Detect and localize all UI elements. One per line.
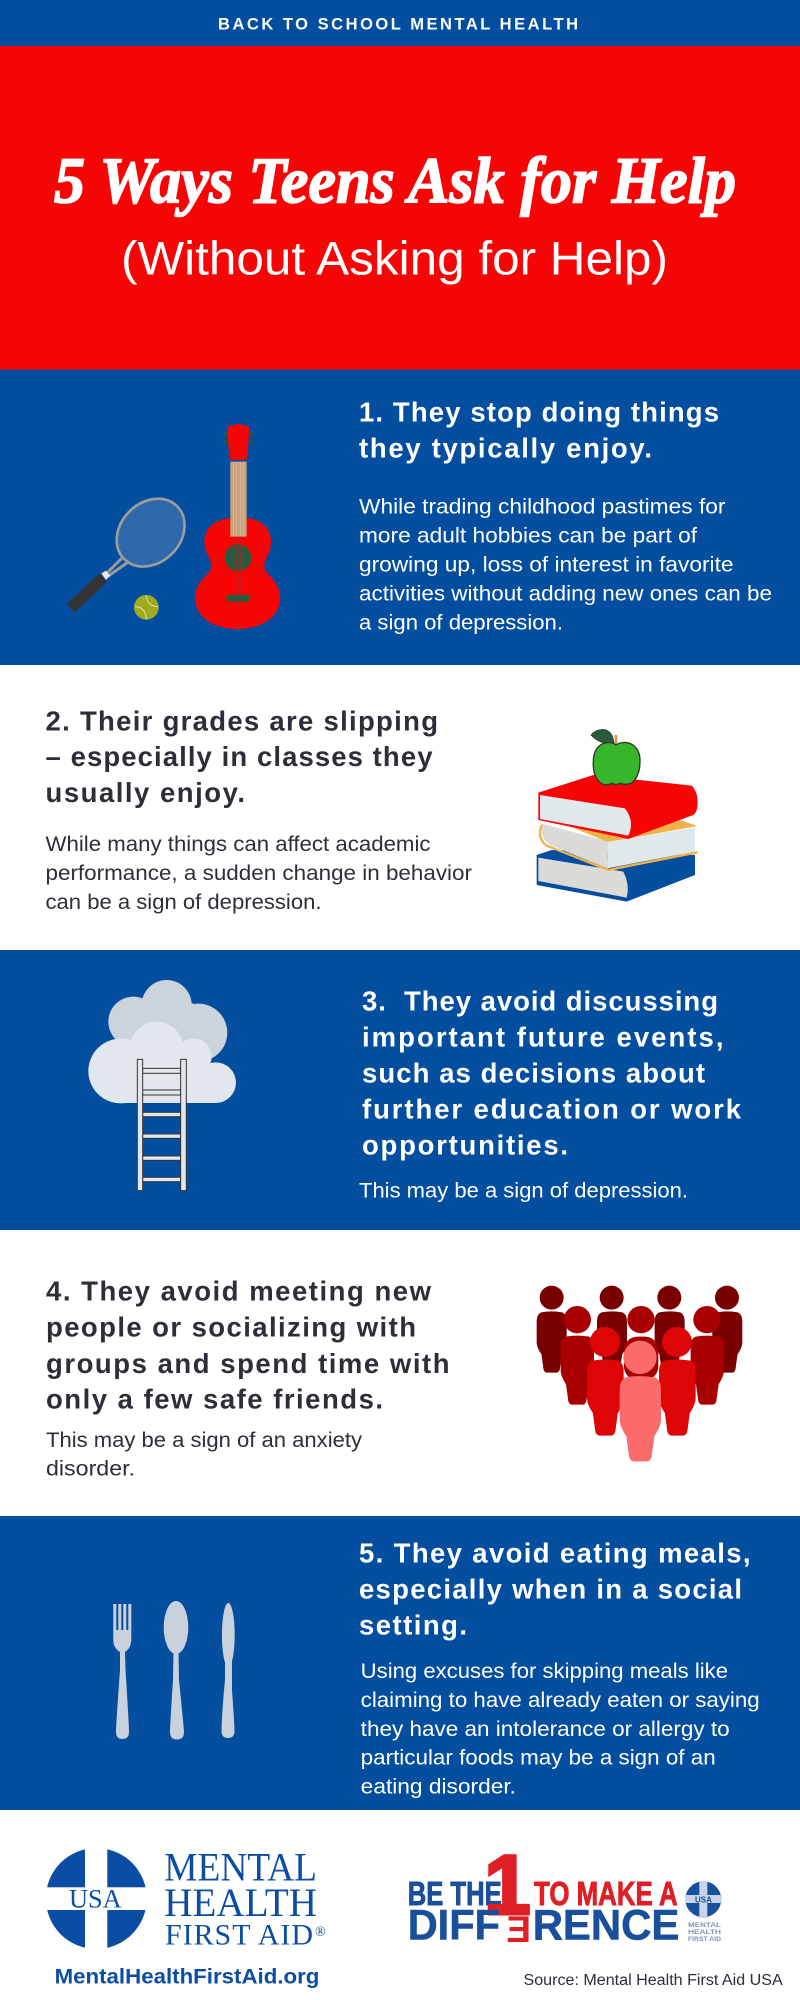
body text: activities without adding new ones can be [359, 582, 772, 606]
icon: small logo: HEALTH [688, 1929, 721, 1936]
heading: especially when in a social [359, 1573, 742, 1604]
body text [46, 1429, 363, 1481]
icon: cross in circle [44, 1846, 149, 1951]
body text: growing up, loss of interest in favorite [359, 554, 734, 576]
logo wordmark: FIRST AID [165, 1918, 313, 1951]
title banner [0, 46, 800, 370]
panel: 5 avoid eating meals [0, 1516, 800, 1810]
heading: 1. They stop doing things [359, 396, 719, 428]
body text: eating disorder. [361, 1776, 516, 1798]
title: 5 Ways Teens Ask for Help [54, 144, 736, 218]
heading: usually enjoy. [46, 777, 245, 808]
body text: This may be a sign of depression. [359, 1180, 688, 1203]
heading: setting. [359, 1609, 467, 1640]
icon: racket, ball and ukulele [71, 424, 280, 629]
logo wordmark: ® [315, 1925, 326, 1940]
footer logo: Be the 1 to make a difference [408, 1838, 722, 1950]
logo wordmark: MENTAL [164, 1845, 317, 1890]
body text: performance, a sudden change in behavior [46, 862, 472, 885]
logo wordmark: HEALTH [164, 1880, 317, 1925]
website link text: MentalHealthFirstAid.org [55, 1964, 319, 1988]
icon: cross in circle: USA [69, 1884, 122, 1913]
heading [362, 985, 742, 1160]
heading: people or socializing with [46, 1312, 416, 1342]
heading: opportunities. [362, 1129, 568, 1160]
body text: can be a sign of depression. [46, 891, 322, 914]
heading: 4. They avoid meeting new [46, 1276, 432, 1306]
footer logo: Be the 1 to make a difference: TO MAKE A [534, 1875, 678, 1912]
body text [359, 496, 772, 634]
body text: This may be a sign of an anxiety [46, 1429, 363, 1452]
body text: more adult hobbies can be part of [359, 524, 697, 548]
header bar [0, 0, 800, 46]
icon: books and apple [537, 729, 698, 902]
heading: – especially in classes they [46, 741, 433, 772]
heading: such as decisions about [362, 1057, 705, 1088]
icon: small logo: USA [695, 1896, 712, 1904]
source credit: Source: Mental Health First Aid USA [524, 1972, 783, 1989]
heading [46, 1276, 450, 1414]
heading: further education or work [362, 1093, 742, 1124]
footer logo: Be the 1 to make a difference: DIFF [408, 1901, 500, 1949]
panel: 4 avoid meeting people [0, 1230, 800, 1516]
body text: a sign of depression. [359, 612, 563, 634]
logo wordmark [164, 1845, 326, 1951]
footer logo: Be the 1 to make a difference: BE THE [408, 1875, 502, 1912]
footer logo: Be the 1 to make a difference: RENCE [533, 1901, 679, 1949]
heading: important future events, [362, 1021, 724, 1052]
footer logo: Be the 1 to make a difference: E [506, 1909, 531, 1950]
body text: claiming to have already eaten or saying [361, 1689, 760, 1712]
heading: 3. They avoid discussing [362, 985, 718, 1016]
footer logo: Mental Health First Aid USA [44, 1845, 326, 1951]
icon: small logo [685, 1881, 722, 1943]
body text: disorder. [46, 1458, 135, 1481]
body text: particular foods may be a sign of an [361, 1746, 716, 1770]
icon: fork, spoon and knife [113, 1601, 235, 1740]
heading: 2. Their grades are slipping [46, 706, 438, 737]
heading [359, 1537, 750, 1640]
body text: While trading childhood pastimes for [359, 496, 726, 518]
header bar: BACK TO SCHOOL MENTAL HEALTH [218, 16, 578, 34]
body text: Using excuses for skipping meals like [361, 1660, 728, 1683]
heading: only a few safe friends. [46, 1384, 383, 1414]
icon: small logo: FIRST AID [688, 1936, 721, 1943]
body text [361, 1660, 760, 1798]
heading [46, 706, 438, 808]
panel: 3 avoid future events [0, 950, 800, 1230]
heading: they typically enjoy. [359, 432, 652, 464]
heading: 5. They avoid eating meals, [359, 1537, 750, 1568]
icon: group of people [537, 1286, 742, 1461]
heading: groups and spend time with [46, 1348, 450, 1379]
body text: they have an intolerance or allergy to [361, 1718, 730, 1741]
body text: While many things can affect academic [46, 833, 430, 856]
panel: 2 grades slipping [0, 665, 800, 950]
icon: cloud and ladder [88, 980, 236, 1191]
panel: 1 stop doing things [0, 370, 800, 665]
heading [359, 396, 719, 464]
subtitle: (Without Asking for Help) [121, 232, 668, 284]
body text [46, 833, 472, 914]
footer logo: Be the 1 to make a difference: 1 [484, 1838, 531, 1932]
icon: small logo: MENTAL [688, 1922, 721, 1929]
